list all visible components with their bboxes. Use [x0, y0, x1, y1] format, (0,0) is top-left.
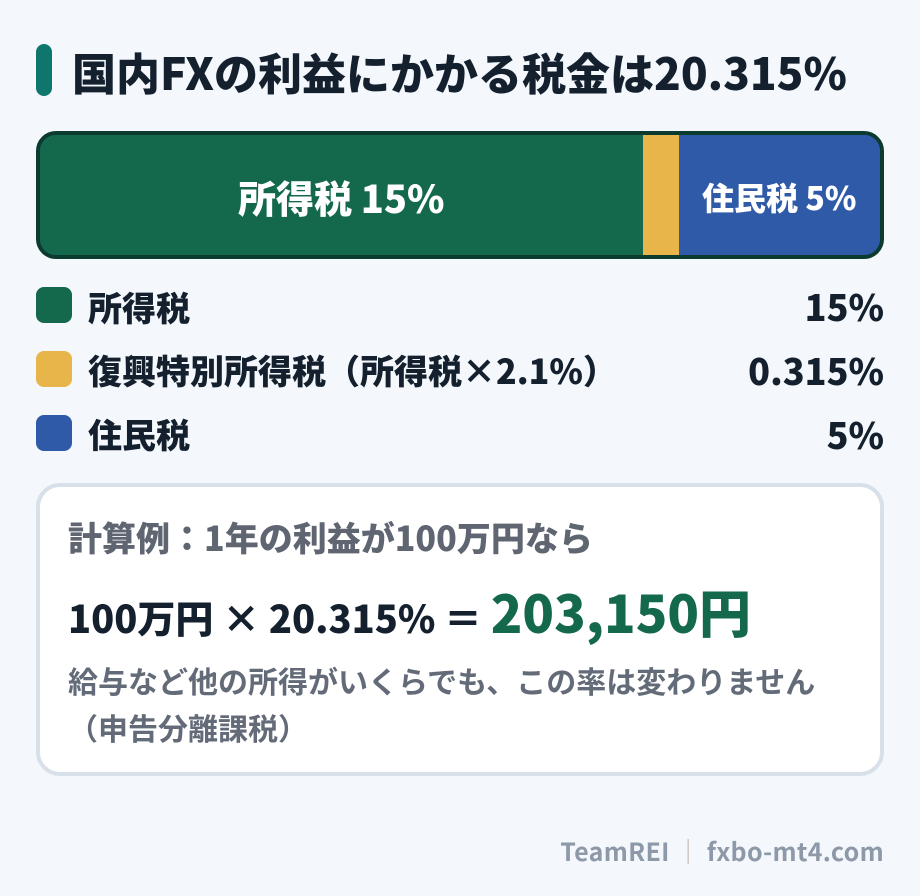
bar label: resident tax: 住民税 5% — [702, 174, 856, 220]
footer credit: TeamREI ｜ fxbo-mt4.com — [560, 833, 884, 869]
legend value: resident tax: 5% — [827, 408, 884, 460]
note: 給与など他の所得がいくらでも、この率は変わりません（申告分離課税） — [68, 658, 815, 749]
title: 国内FXの利益にかかる税金は20.315% — [72, 39, 847, 103]
legend label: reconstruction tax: 復興特別所得税（所得税×2.1%） — [88, 345, 617, 394]
legend value: income tax: 15% — [805, 280, 884, 332]
calculation heading: 計算例：1年の利益が100万円なら — [68, 512, 593, 561]
segment: income tax — [40, 135, 643, 255]
legend swatch: income tax — [36, 287, 72, 323]
legend label: resident tax: 住民税 — [88, 409, 190, 458]
panel: calculation example — [36, 483, 884, 776]
legend swatch: reconstruction tax — [36, 351, 72, 387]
title accent bar — [36, 44, 52, 96]
bar label: income tax: 所得税 15% — [238, 169, 444, 224]
legend swatch: resident tax — [36, 415, 72, 451]
stacked bar — [36, 131, 884, 259]
segment: resident tax — [679, 135, 880, 255]
formula: 100万円 × 20.315% ＝ 203,150円 — [68, 573, 751, 648]
segment: reconstruction tax — [643, 135, 679, 255]
legend label: income tax: 所得税 — [88, 282, 190, 331]
legend value: reconstruction tax: 0.315% — [748, 344, 884, 396]
